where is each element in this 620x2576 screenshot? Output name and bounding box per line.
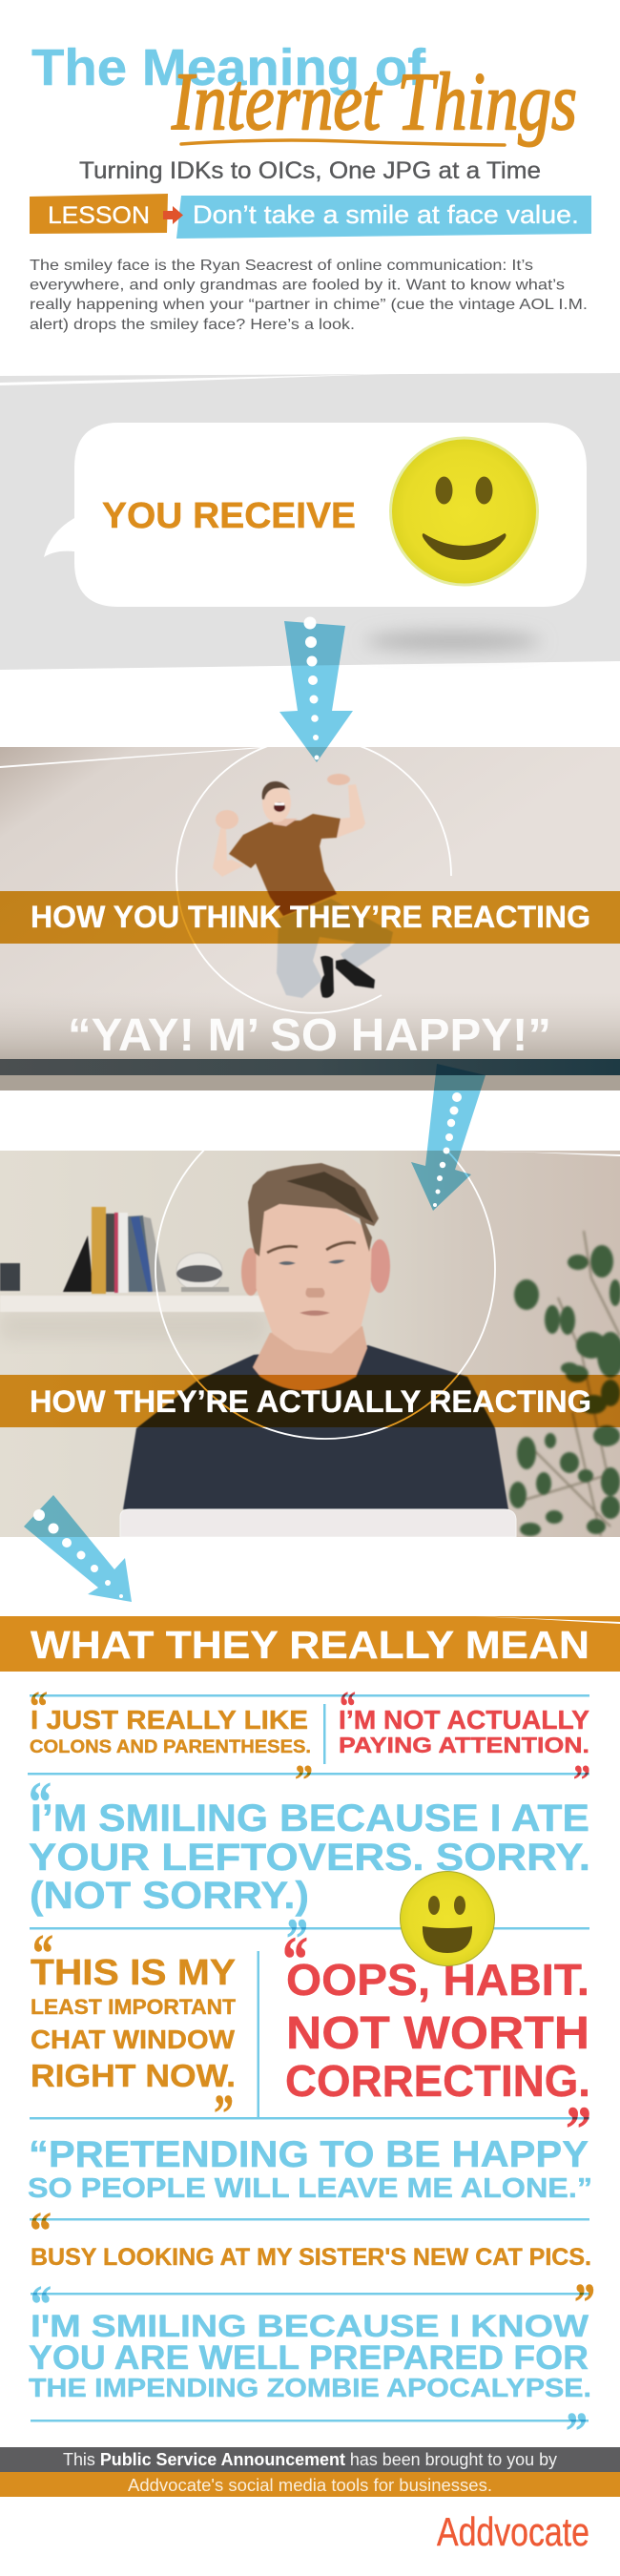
intro paragraph: alert) drops the smiley face? Here’s a look.	[30, 317, 355, 333]
quote: pretending to be happy: SO PEOPLE WILL LEAVE ME ALONE.”	[28, 2173, 592, 2204]
subtitle: Turning IDKs to OICs, One JPG at a Time	[79, 157, 541, 184]
panel: you receive	[0, 373, 620, 670]
lesson banner: Don’t take a smile at face value.	[193, 200, 579, 229]
quote: colons and parentheses: “	[30, 1683, 48, 1730]
quote: not paying attention: ”	[573, 1756, 590, 1803]
intro paragraph: really happening when your “partner in chime” (cue the vintage AOL I.M.	[30, 297, 588, 313]
band heading: HOW THEY’RE ACTUALLY REACTING	[30, 1384, 591, 1419]
quote: not paying attention: I’M NOT ACTUALLY	[339, 1705, 589, 1735]
panel: photo how they're actually reacting	[0, 1151, 620, 1537]
quote: least important chat window: RIGHT NOW.	[31, 2058, 236, 2093]
quote: ate your leftovers: YOUR LEFTOVERS. SORRY.	[29, 1837, 590, 1879]
shelf with books	[0, 1207, 265, 1340]
quote: zombie apocalypse	[29, 2275, 591, 2462]
intro paragraph: The smiley face is the Ryan Seacrest of online communication: It’s	[30, 258, 533, 274]
bubble shadow	[365, 632, 541, 651]
quote: not paying attention: “	[340, 1683, 356, 1730]
quote: cat pics: BUSY LOOKING AT MY SISTER'S NEW CAT PICS.	[31, 2244, 591, 2271]
band heading: HOW YOU THINK THEY’RE REACTING	[31, 900, 590, 934]
arrow: from photo to quotes	[24, 1495, 132, 1602]
quote: colons and parentheses: COLONS AND PARENTHESES.	[30, 1736, 311, 1757]
footer credit bars: This Public Service Announcement has been brought to you by	[63, 2450, 557, 2469]
quote: oops habit	[282, 1922, 591, 2165]
circle outline	[176, 738, 451, 1013]
quote: zombie apocalypse: ”	[566, 2402, 588, 2462]
quote: oops habit: OOPS, HABIT.	[286, 1955, 589, 2005]
you receive label: YOU RECEIVE	[102, 496, 356, 536]
footer credit bars	[0, 2447, 620, 2497]
quote: least important chat window: CHAT WINDOW	[31, 2025, 236, 2054]
arrow: from photo to photo	[411, 1064, 486, 1211]
icon: smiley	[391, 438, 538, 585]
panel: photo how you think they're reacting	[0, 738, 620, 1091]
quote: zombie apocalypse: “	[31, 2275, 52, 2335]
quote: cat pics	[30, 2202, 595, 2333]
intro paragraph: everywhere, and only grandmas are fooled by it. Want to know what’s	[30, 277, 565, 294]
quote grid rules	[28, 1694, 589, 2421]
quote: colons and parentheses	[30, 1683, 313, 1803]
jumping man	[213, 774, 393, 998]
quote: least important chat window: “	[32, 1924, 53, 1984]
quote: least important chat window	[31, 1924, 237, 2144]
quote: ate your leftovers: I’M SMILING BECAUSE I ATE	[31, 1797, 589, 1839]
quote: ate your leftovers: ”	[286, 1907, 308, 1970]
reaction band	[0, 891, 620, 944]
lesson banner: LESSON	[48, 202, 150, 229]
title: The Meaning of: The Meaning of	[31, 39, 426, 96]
plant	[509, 1231, 620, 1536]
quote: zombie apocalypse: THE IMPENDING ZOMBIE APOCALYPSE.	[29, 2373, 591, 2402]
quote: pretending to be happy	[28, 2134, 592, 2204]
quote: least important chat window: ”	[214, 2085, 234, 2144]
seated man	[123, 1163, 508, 1509]
arrow: from smiley to photo	[279, 616, 353, 762]
reaction band	[0, 1375, 620, 1427]
quote: not paying attention: PAYING ATTENTION.	[339, 1733, 589, 1757]
icon: laughing smiley	[401, 1872, 494, 1965]
heading band: what they really mean	[0, 1616, 620, 1672]
quote: cat pics: “	[30, 2202, 52, 2261]
quote: oops habit: “	[282, 1922, 308, 1995]
speech bubble	[44, 423, 587, 607]
quote: not paying attention	[339, 1683, 590, 1803]
quote: oops habit: NOT WORTH	[286, 2008, 589, 2059]
quote: ate your leftovers: (NOT SORRY.)	[30, 1875, 309, 1917]
circle outline	[155, 1151, 496, 1440]
quote: cat pics: ”	[574, 2274, 595, 2333]
quote: least important chat window: THIS IS MY	[31, 1953, 236, 1993]
quote: least important chat window: LEAST IMPORTANT	[31, 1995, 237, 2019]
laptop	[120, 1509, 516, 1537]
quote: colons and parentheses: ”	[295, 1756, 313, 1803]
quote: oops habit: CORRECTING.	[285, 2056, 590, 2106]
quote: zombie apocalypse: I'M SMILING BECAUSE I KNOW	[31, 2309, 589, 2343]
quote: “YAY! M’ SO HAPPY!”	[68, 1010, 551, 1061]
footer credit bars: Addvocate's social media tools for businesses.	[128, 2476, 492, 2495]
quote: oops habit: ”	[566, 2092, 591, 2165]
quote: pretending to be happy: “PRETENDING TO BE HAPPY	[29, 2134, 589, 2175]
heading band: what they really mean: WHAT THEY REALLY MEAN	[31, 1623, 589, 1667]
quote: zombie apocalypse: YOU ARE WELL PREPARED FOR	[29, 2339, 589, 2377]
intro paragraph	[30, 258, 588, 333]
quote: ate your leftovers	[29, 1771, 590, 1970]
lesson banner	[30, 194, 591, 239]
quote: ate your leftovers: “	[29, 1771, 52, 1834]
quote: colons and parentheses: I JUST REALLY LIKE	[31, 1705, 308, 1735]
